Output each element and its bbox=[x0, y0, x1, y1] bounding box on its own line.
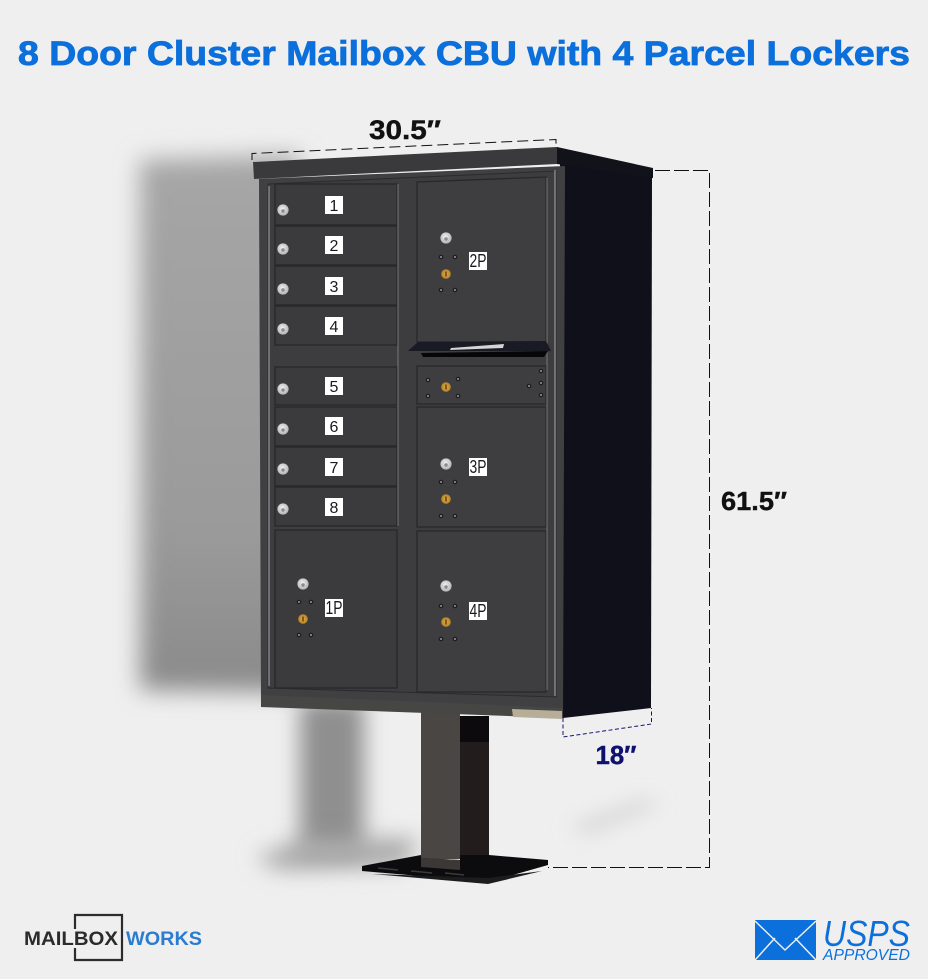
front frame inner bbox=[268, 171, 556, 697]
floor shadow right bbox=[568, 800, 660, 832]
door number labels: 4P bbox=[470, 601, 486, 621]
mail slot bbox=[408, 341, 551, 357]
door number labels: 2P bbox=[470, 251, 486, 271]
base strip bbox=[261, 695, 563, 718]
wall shadow of mailbox bbox=[140, 155, 300, 692]
serial plate bbox=[512, 709, 562, 719]
door number labels: 5 bbox=[330, 379, 339, 396]
top cap front bbox=[253, 147, 557, 179]
locks bbox=[277, 204, 543, 641]
door number labels: 2 bbox=[330, 238, 339, 255]
logo: Mailbox Works: MAILBOX bbox=[24, 929, 118, 950]
door number labels: 8 bbox=[330, 500, 339, 517]
dimension: depth: 18″ bbox=[596, 740, 636, 770]
logo: Mailbox Works bbox=[24, 915, 202, 960]
right column doors bbox=[417, 177, 546, 692]
logo: USPS Approved: APPROVED bbox=[822, 947, 910, 964]
door number labels: 7 bbox=[330, 460, 339, 477]
side panel bbox=[560, 164, 652, 718]
dimension: width: 30.5″ bbox=[369, 115, 441, 145]
dimension: height: 61.5″ bbox=[721, 486, 787, 516]
frame highlights bbox=[269, 170, 555, 696]
wall shadow of post bbox=[300, 700, 364, 855]
top cap side bbox=[557, 147, 653, 178]
logo: USPS Approved bbox=[755, 913, 910, 964]
dimension: depth bbox=[563, 708, 652, 770]
mailbox unit bbox=[253, 147, 653, 884]
logo: Mailbox Works: WORKS bbox=[126, 929, 202, 950]
door number labels bbox=[325, 196, 487, 621]
column divider highlights bbox=[398, 178, 547, 690]
door number labels: 4 bbox=[330, 319, 339, 336]
left column doors bbox=[275, 184, 397, 688]
door number labels: 1 bbox=[330, 198, 339, 215]
door number labels: 3P bbox=[470, 457, 486, 477]
front body bbox=[259, 166, 565, 718]
door number labels: 1P bbox=[326, 598, 342, 618]
door number labels: 3 bbox=[330, 279, 339, 296]
dimension: width bbox=[252, 115, 556, 160]
logo: USPS Approved: USPS bbox=[823, 913, 910, 954]
floor shadow bbox=[255, 838, 418, 870]
title: 8 Door Cluster Mailbox CBU with 4 Parcel Lockers bbox=[18, 35, 910, 73]
post bbox=[421, 712, 489, 859]
dimension: height bbox=[548, 170, 787, 868]
door number labels: 6 bbox=[330, 419, 339, 436]
base plate bbox=[362, 855, 548, 884]
